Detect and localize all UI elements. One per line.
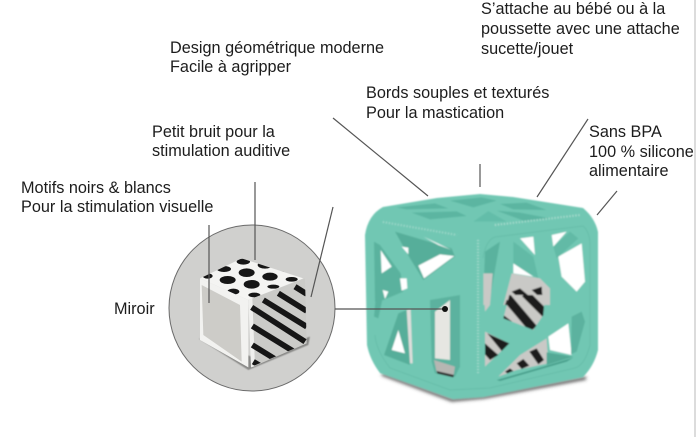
mini cube faces [200,258,307,367]
label: mirror: Miroir [114,300,155,318]
left face lower openings [374,295,460,377]
top face openings [397,197,550,222]
label: BPA free: 100 % silicone [589,143,694,161]
label: soft edges: Bords souples et texturés [366,84,549,102]
label: BPA free: alimentaire [589,162,668,180]
label: patterns: Motifs noirs & blancs [21,179,171,197]
right face upper openings [483,232,585,305]
label: sound: Petit bruit pour la [152,123,276,141]
icon: magnified circle with inner cube [169,225,335,391]
label: geometric design: Design géométrique moderne [170,39,384,57]
label: attachment: poussette avec une attache [481,20,680,38]
left face upper openings [374,232,455,302]
callout lines [209,118,617,309]
right face lower openings [484,293,585,381]
left window with mirror [430,295,460,377]
label: sound: stimulation auditive [152,142,290,160]
label: geometric design: Facile à agripper [170,58,292,76]
callout dot on mirror [442,306,448,312]
label: patterns: Pour la stimulation visuelle [21,198,213,216]
icon: teal teether cube [365,194,598,400]
label: attachment: sucette/jouet [481,40,574,58]
label: BPA free: Sans BPA [589,123,662,141]
label: soft edges: Pour la mastication [366,104,504,122]
cube edge texture [375,215,590,390]
label: attachment: S’attache au bébé ou à la [481,0,666,18]
